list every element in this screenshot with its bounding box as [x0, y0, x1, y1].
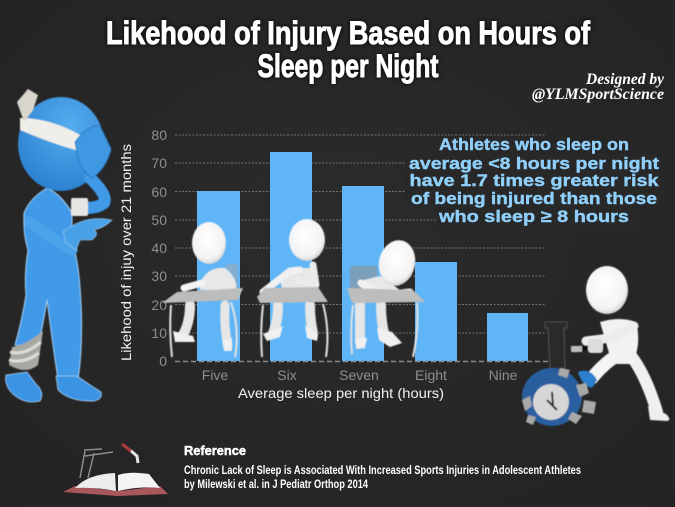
designer credit: [532, 71, 665, 103]
x axis labels: Six: [277, 367, 297, 383]
y axis labels: 60: [151, 184, 167, 200]
y axis title: Likehood of injuy over 21 months: [119, 144, 134, 361]
x axis labels: Nine: [489, 367, 518, 383]
title: Sleep per Night: [258, 48, 439, 84]
y axis labels: 70: [151, 155, 167, 171]
icon: white figure smashing clock: [522, 266, 669, 426]
left page: [75, 473, 116, 491]
bars: [197, 152, 528, 361]
x axis labels: Eight: [415, 367, 447, 383]
y axis labels: 30: [151, 268, 167, 284]
x axis labels: Five: [202, 367, 228, 383]
back foot: [648, 406, 669, 421]
icon: injured blue figure: [6, 89, 112, 402]
broken clock: [522, 368, 596, 426]
raised hand: [75, 126, 111, 178]
title: [106, 15, 590, 84]
hand: [588, 339, 603, 353]
torso: [600, 319, 638, 364]
lower arm: [30, 222, 72, 250]
callout backing: [405, 154, 665, 230]
diving board: [80, 449, 113, 478]
y axis labels: 40: [151, 240, 167, 256]
icon: open book with diver: [63, 444, 168, 496]
x axis labels: [202, 367, 518, 383]
ankle bandage: [9, 331, 43, 370]
designer credit: @YLMSportScience: [532, 86, 664, 103]
callout text: who sleep ≥ 8 hours: [438, 207, 629, 226]
arm: [586, 326, 634, 341]
reference: [184, 443, 581, 491]
pointing hand: [63, 218, 112, 250]
student two: [257, 219, 328, 357]
hammer handle: [572, 344, 605, 350]
y axis labels: 20: [151, 297, 167, 313]
right page: [118, 473, 160, 491]
book cover: [63, 486, 168, 496]
baseline: [175, 360, 548, 362]
hammer head: [545, 322, 567, 370]
callout text: of being injured than those: [411, 189, 657, 208]
body and legs: [15, 188, 82, 380]
callout text: average <8 hours per night: [409, 154, 659, 173]
callout text: have 1.7 times greater risk: [410, 171, 659, 190]
head: [586, 266, 628, 314]
raised arm: [78, 178, 105, 208]
diver: [122, 444, 138, 463]
icon: sleepy students at desks: [162, 219, 425, 357]
title: Likehood of Injury Based on Hours of: [106, 15, 590, 51]
y axis labels: 50: [151, 212, 167, 228]
x axis title: Average sleep per night (hours): [238, 385, 444, 401]
callout text: [409, 135, 659, 226]
reference: by Milewski et al. in J Pediatr Orthop 2014: [184, 477, 368, 491]
far foot: [56, 376, 101, 401]
designer credit: Designed by: [585, 71, 665, 88]
head bandage: [20, 118, 89, 153]
blue shoe: [578, 371, 597, 388]
wrist bandage: [71, 198, 88, 216]
grid lines: [175, 135, 545, 333]
y axis labels: 10: [151, 325, 167, 341]
front leg: [592, 352, 622, 378]
near foot: [6, 372, 42, 402]
bandage knot: [17, 89, 38, 122]
y axis labels: 0: [159, 353, 167, 369]
reference: Reference: [184, 443, 246, 458]
callout: [405, 135, 665, 230]
y axis labels: [151, 127, 167, 369]
student one: [162, 222, 243, 357]
callout text: Athletes who sleep on: [439, 135, 629, 154]
student three: [347, 237, 425, 357]
bar chart: [119, 127, 548, 401]
y axis labels: 80: [151, 127, 167, 143]
back leg: [628, 352, 657, 412]
x axis labels: Seven: [339, 367, 379, 383]
head: [18, 97, 104, 191]
